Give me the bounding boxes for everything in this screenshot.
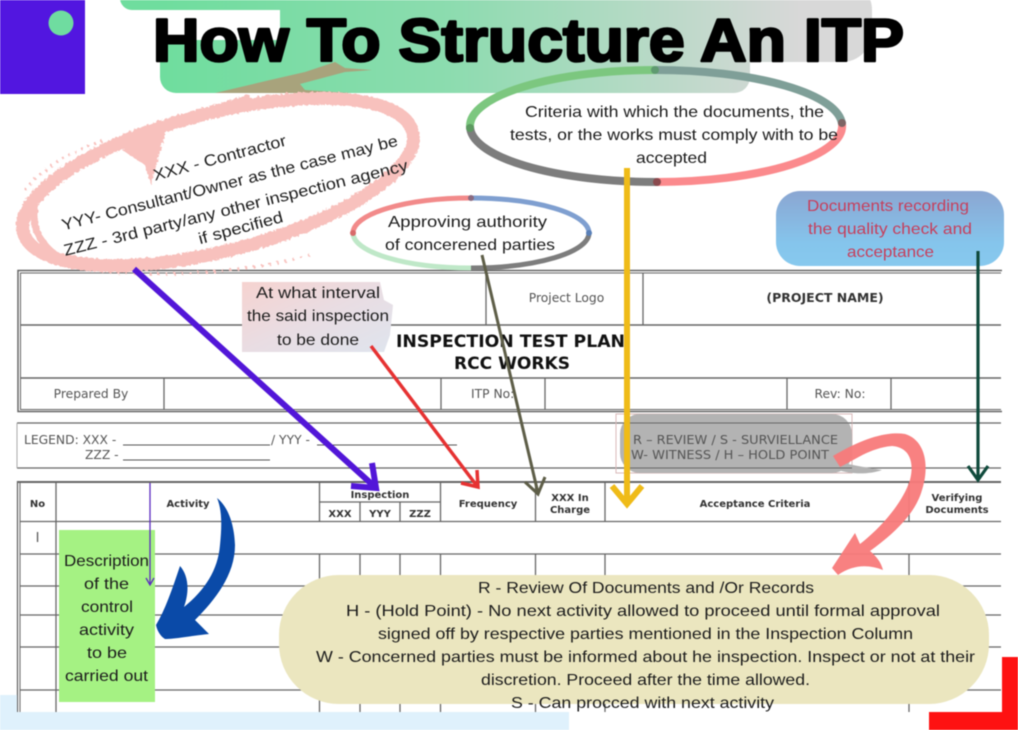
callout: acceptance criteria ellipse xyxy=(466,66,846,186)
decoration: purple corner square with green dot xyxy=(0,0,85,94)
callout: verifying documents blue box: the quality check and xyxy=(808,221,972,238)
callout: frequency interval box: to be done xyxy=(277,332,359,349)
panel: legend row xyxy=(17,423,1001,468)
bottom decoration: red corner xyxy=(929,657,1018,730)
panel: activity description green box: Description xyxy=(64,553,149,570)
panel: activity description green box: carried out xyxy=(65,668,149,685)
callout: approving authority ellipse xyxy=(350,195,592,268)
callout: approving authority ellipse: Approving authority xyxy=(388,214,547,231)
arrow: contractor legend to inspection column xyxy=(134,269,376,488)
panel: hold point key bubble: W- WITNESS / H – HOLD POINT xyxy=(631,448,829,462)
arrow: interval to frequency column xyxy=(371,346,478,487)
callout: party definitions in pink brush ellipse: if specified xyxy=(197,209,285,248)
callout: party definitions in pink brush ellipse: ZZZ - 3rd party/any other inspection agency xyxy=(62,158,410,260)
table column headers: YYY xyxy=(368,509,392,520)
arrow: pink curved arrow from hold point to definitions xyxy=(832,433,926,575)
callout: acceptance criteria ellipse: tests, or the works must comply with to be xyxy=(510,127,838,144)
table column headers: No xyxy=(30,499,45,510)
table column headers: Acceptance Criteria xyxy=(700,499,810,510)
table column headers: Documents xyxy=(925,505,989,516)
arrow: approving authority to in charge column xyxy=(482,255,545,494)
callout: verifying documents blue box xyxy=(776,191,1004,266)
panel: activity description green box xyxy=(59,530,155,702)
table column headers: Charge xyxy=(550,505,590,516)
table column headers: Frequency xyxy=(459,499,518,510)
table column headers: Activity xyxy=(166,499,210,510)
arrow: documents to verifying documents column xyxy=(968,251,988,480)
callout: approving authority ellipse: of concerened parties xyxy=(385,237,555,254)
table column headers: Verifying xyxy=(932,493,982,504)
panel: review hold witness surveillance definitions: signed off by respective parties mentioned in the Inspection Column xyxy=(378,626,913,643)
table column headers: ZZZ xyxy=(409,509,431,520)
table column headers: I xyxy=(36,531,39,546)
callout: frequency interval box: At what interval xyxy=(256,285,380,302)
bottom decoration: light blue band xyxy=(0,695,569,730)
panel: activity description green box: activity xyxy=(79,622,134,639)
callout: party definitions in pink brush ellipse: XXX - Contractor xyxy=(151,133,289,185)
title: How To Structure An ITP xyxy=(153,7,904,74)
panel: review hold witness surveillance definitions: discretion. Proceed after the time allowed. xyxy=(481,672,810,689)
table column headers xyxy=(30,490,989,546)
callout: acceptance criteria ellipse: Criteria with which the documents, the xyxy=(525,104,824,121)
panel: ITP header table xyxy=(18,260,1018,420)
panel: activity description green box: of the xyxy=(84,576,129,593)
callout: party definitions in pink brush ellipse xyxy=(6,65,430,299)
arrow: big blue curved arrow to description xyxy=(156,498,235,639)
panel: legend row: ZZZ - xyxy=(85,448,119,462)
header table text: ITP No: xyxy=(471,387,514,401)
panel: hold point key bubble: R – REVIEW / S - SURVIELLANCE xyxy=(633,433,838,447)
panel: hold point key bubble xyxy=(616,414,882,473)
header table text: Project Logo xyxy=(529,291,604,305)
panel: ITP activity table grid xyxy=(17,481,1001,712)
table column headers: XXX xyxy=(328,509,352,520)
callout: acceptance criteria ellipse: accepted xyxy=(636,150,707,167)
panel: activity description green box: control xyxy=(81,599,133,616)
header table text: (PROJECT NAME) xyxy=(766,290,884,305)
arrow: thin purple activity pointer xyxy=(146,483,154,585)
panel: legend row: / YYY - xyxy=(271,433,310,447)
panel: review hold witness surveillance definitions: H - (Hold Point) - No next activity allowed to proceed until formal approval xyxy=(346,603,940,620)
panel: activity description green box: to be xyxy=(87,645,127,662)
header table text: Rev: No: xyxy=(814,387,866,401)
panel: review hold witness surveillance definitions: W - Concerned parties must be informed about he inspection. Inspect or not at their xyxy=(316,649,976,666)
header table text: RCC WORKS xyxy=(454,354,570,373)
decoration: green title banner xyxy=(120,0,872,93)
callout: party definitions in pink brush ellipse: YYY- Consultant/Owner as the case may be xyxy=(60,133,400,234)
table column headers: XXX In xyxy=(551,493,589,504)
panel: review hold witness surveillance definitions: S - Can procced with next activity xyxy=(511,695,774,712)
panel: review hold witness surveillance definitions: R - Review Of Documents and /Or Records xyxy=(478,580,814,597)
table column headers: Inspection xyxy=(351,490,409,501)
callout: verifying documents blue box: Documents recording xyxy=(807,198,969,215)
panel: review hold witness surveillance definitions xyxy=(279,575,989,712)
panel: legend row: LEGEND: XXX - xyxy=(24,433,116,447)
callout: frequency interval box xyxy=(242,282,393,352)
arrow: criteria to acceptance criteria column xyxy=(612,168,642,504)
header table text: INSPECTION TEST PLAN xyxy=(396,332,625,351)
callout: frequency interval box: the said inspection xyxy=(247,308,389,325)
callout: verifying documents blue box: acceptance xyxy=(847,244,934,261)
header table text xyxy=(54,290,884,401)
header table text: Prepared By xyxy=(54,387,128,401)
